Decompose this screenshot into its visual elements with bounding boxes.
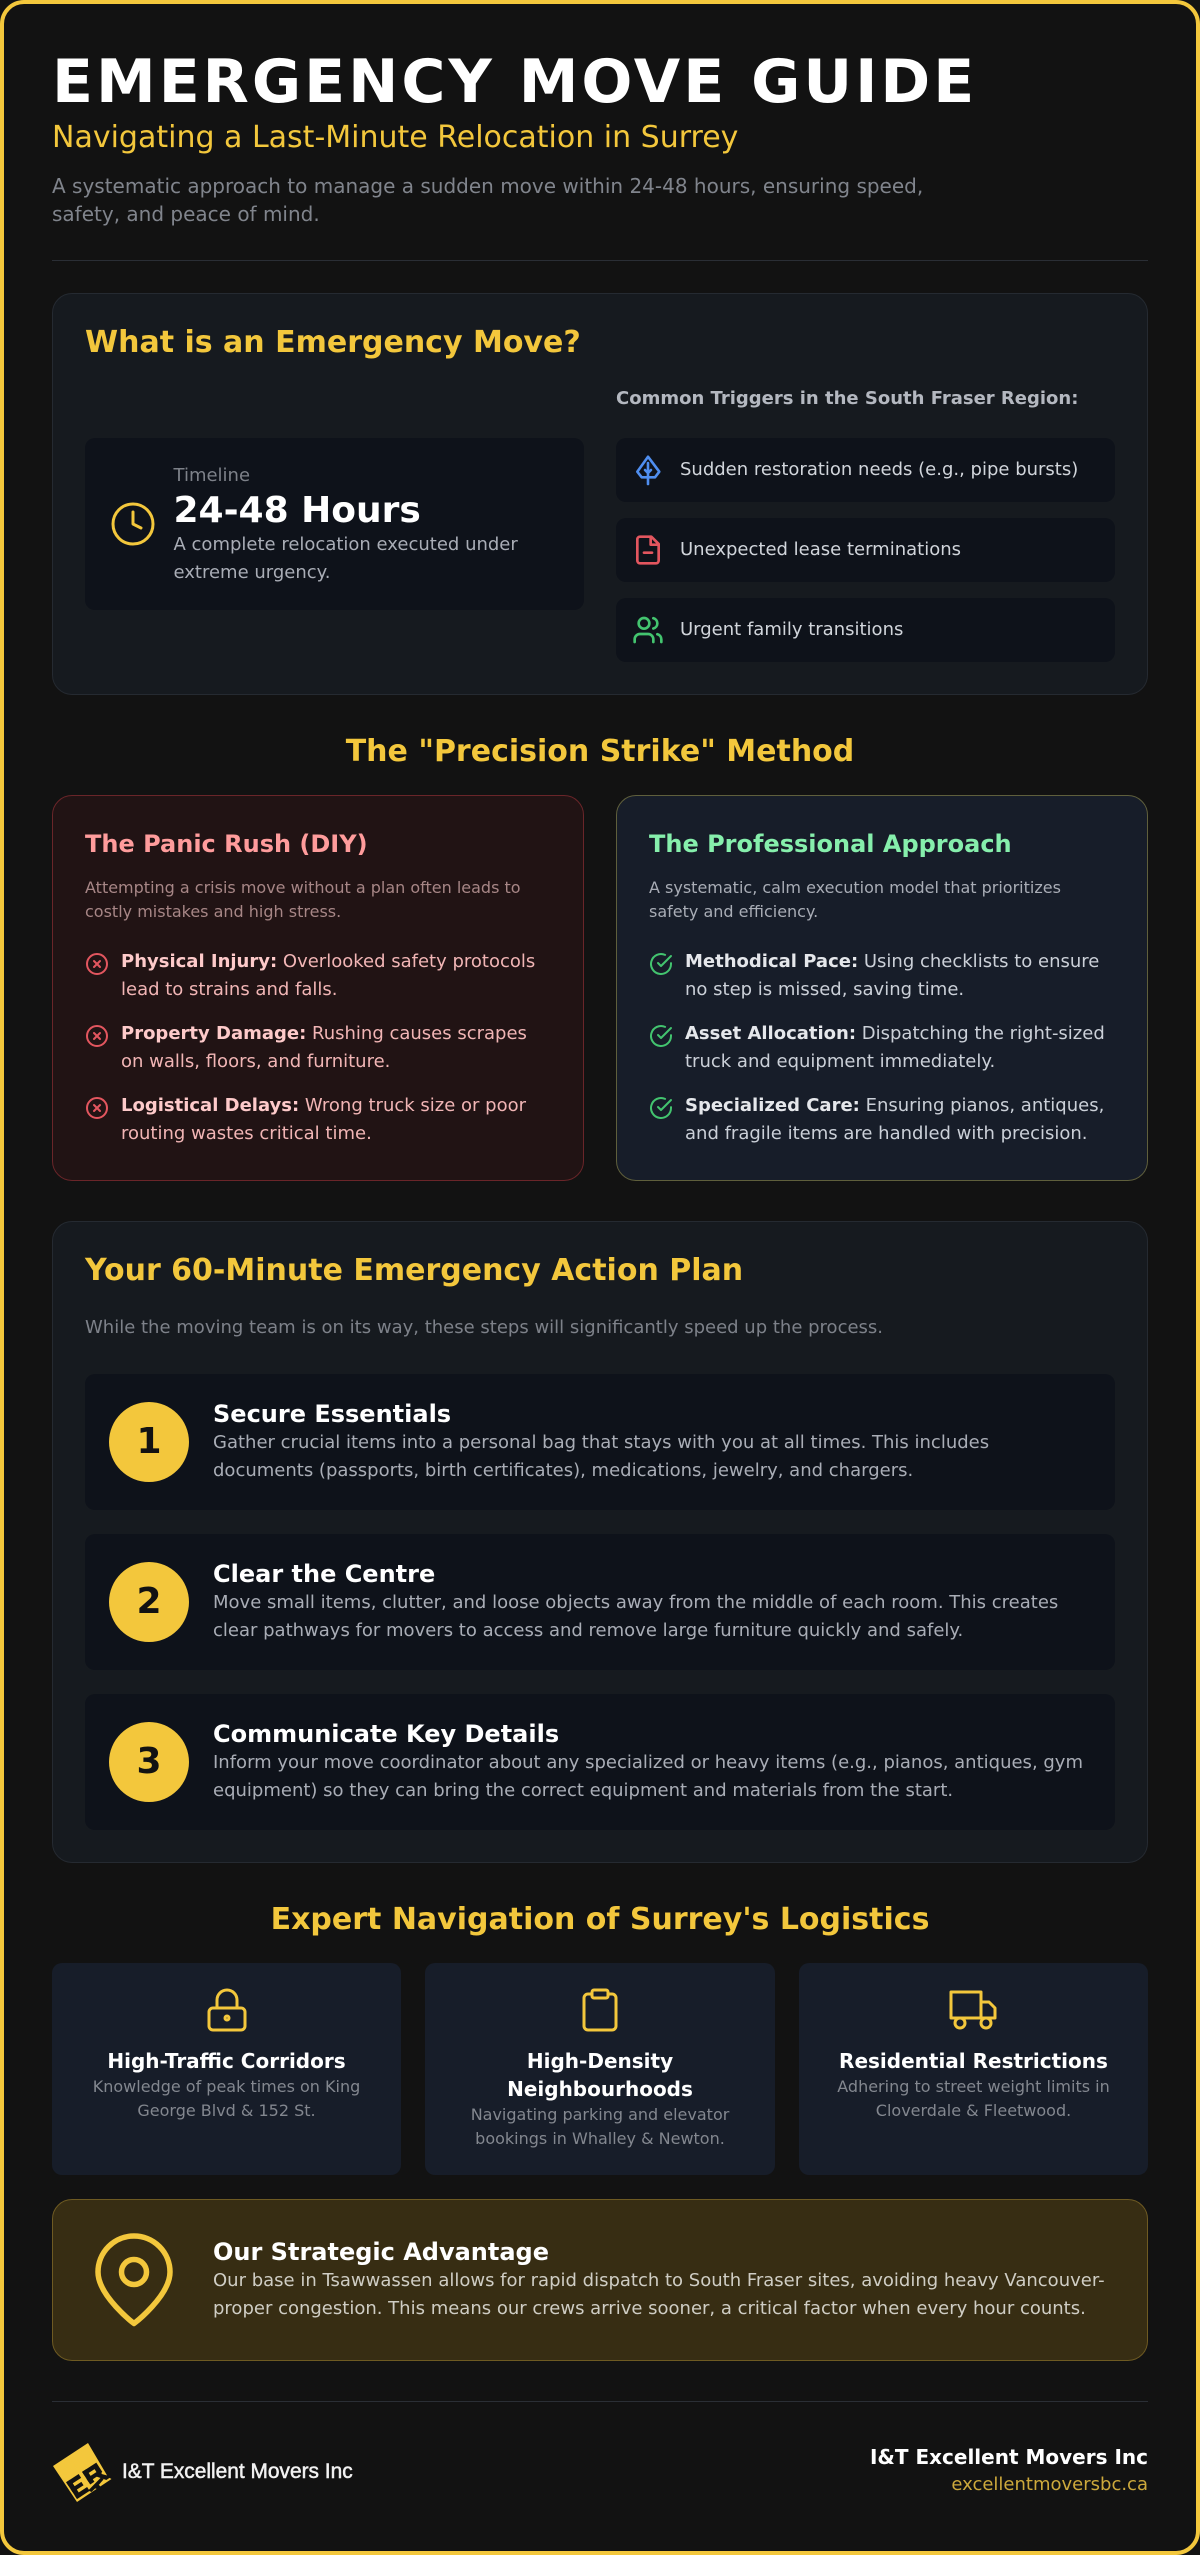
- step title: Clear the Centre: [213, 1560, 435, 1588]
- panel description: [649, 878, 1061, 921]
- intro text: [52, 174, 923, 226]
- card: high-traffic corridors: [52, 1963, 401, 2175]
- logo mark: [52, 2436, 114, 2506]
- step 3: [85, 1694, 1115, 1830]
- triggers heading: Common Triggers in the South Fraser Region:: [616, 388, 1078, 409]
- card: residential restrictions: [799, 1963, 1148, 2175]
- step 1: [85, 1374, 1115, 1510]
- panel: the panic rush: [52, 795, 584, 1181]
- panel description: Attempting a crisis move without a plan often leads to: [85, 878, 521, 897]
- item text: Logistical Delays: Wrong truck size or poor: [121, 1095, 526, 1116]
- card title: High-Traffic Corridors: [107, 2049, 346, 2073]
- item text: [121, 951, 535, 1000]
- panel: action plan: [52, 1221, 1148, 1863]
- website: excellentmoversbc.ca: [951, 2474, 1148, 2495]
- number badge: [109, 1722, 189, 1802]
- trigger text: Sudden restoration needs (e.g., pipe bursts): [680, 459, 1078, 480]
- panel description: safety and efficiency.: [649, 902, 818, 921]
- logo: [52, 2436, 362, 2506]
- icon: map pin: [95, 2233, 173, 2326]
- number badge: 2: [136, 1581, 162, 1622]
- card text: Adhering to street weight limits in: [837, 2077, 1110, 2096]
- trigger text: Unexpected lease terminations: [680, 539, 961, 560]
- card title: High-Density: [527, 2049, 673, 2073]
- step text: Move small items, clutter, and loose objects away from the middle of each room. This creates: [213, 1592, 1058, 1613]
- icon: people: [633, 616, 663, 644]
- panel: what is an emergency move: [52, 293, 1148, 695]
- intro text: safety, and peace of mind.: [52, 202, 320, 226]
- panel description: A systematic, calm execution model that prioritizes: [649, 878, 1061, 897]
- heading: Your 60-Minute Emergency Action Plan: [85, 1253, 743, 1288]
- step text: [213, 1432, 989, 1481]
- item text: [685, 951, 1099, 1000]
- timeline box: [85, 438, 584, 610]
- item: methodical pace: [650, 951, 1099, 1000]
- company details: [748, 2442, 1148, 2502]
- item text: [121, 1095, 526, 1144]
- timeline label: Timeline: [174, 464, 250, 486]
- step title: Secure Essentials: [213, 1400, 451, 1428]
- card text: [471, 2105, 730, 2148]
- card: high-density neighbourhoods: [425, 1963, 775, 2175]
- panel heading: The Panic Rush (DIY): [85, 830, 368, 858]
- item text: Specialized Care: Ensuring pianos, antiques,: [685, 1095, 1104, 1116]
- item text: truck and equipment immediately.: [685, 1051, 995, 1072]
- number badge: [109, 1562, 189, 1642]
- item text: Property Damage: Rushing causes scrapes: [121, 1023, 527, 1044]
- step title: Communicate Key Details: [213, 1720, 559, 1748]
- step text: [213, 1592, 1058, 1641]
- callout: strategic advantage: [52, 2199, 1148, 2361]
- step text: Gather crucial items into a personal bag that stays with you at all times. This includes: [213, 1432, 989, 1453]
- timeline description: [174, 534, 518, 582]
- icon: check circle: [650, 1025, 672, 1047]
- heading: precision strike: The "Precision Strike" Method: [346, 734, 854, 769]
- timeline description: extreme urgency.: [174, 562, 330, 582]
- item text: Methodical Pace: Using checklists to ensure: [685, 951, 1099, 972]
- callout title: Our Strategic Advantage: [213, 2238, 549, 2266]
- item text: [685, 1023, 1105, 1072]
- item text: [121, 1023, 527, 1072]
- icon: truck: [950, 1990, 996, 2030]
- card title: Residential Restrictions: [839, 2049, 1108, 2073]
- timeline value: 24-48 Hours: [174, 490, 421, 530]
- item text: lead to strains and falls.: [121, 979, 337, 1000]
- callout text: Our base in Tsawwassen allows for rapid dispatch to South Fraser sites, avoiding heavy Vancouver-: [213, 2270, 1105, 2291]
- callout text: [213, 2270, 1105, 2319]
- panel heading: The Professional Approach: [649, 830, 1012, 858]
- icon: restoration: [636, 455, 661, 486]
- card text: George Blvd & 152 St.: [137, 2101, 316, 2120]
- card title: [507, 2049, 693, 2101]
- trigger: family transitions: [616, 598, 1115, 662]
- item: asset allocation: [650, 1023, 1105, 1072]
- item text: no step is missed, saving time.: [685, 979, 964, 1000]
- title: EMERGENCY MOVE GUIDE: [52, 47, 977, 117]
- card title: Neighbourhoods: [507, 2077, 693, 2101]
- item text: Physical Injury: Overlooked safety protocols: [121, 951, 535, 972]
- trigger text: Urgent family transitions: [680, 619, 903, 640]
- icon: x circle: [86, 953, 108, 975]
- item text: on walls, floors, and furniture.: [121, 1051, 390, 1072]
- heading: surrey logistics: Expert Navigation of Surrey's Logistics: [271, 1902, 929, 1937]
- step text: Inform your move coordinator about any specialized or heavy items (e.g., pianos, antiques, gym: [213, 1752, 1083, 1773]
- icon: clipboard: [582, 1988, 618, 2032]
- heading: What is an Emergency Move?: [85, 325, 581, 360]
- icon: document: [636, 535, 660, 565]
- card text: Knowledge of peak times on King: [93, 2077, 360, 2096]
- description: While the moving team is on its way, these steps will significantly speed up the process.: [85, 1317, 883, 1338]
- card text: Navigating parking and elevator: [471, 2105, 729, 2124]
- icon: clock: [112, 502, 154, 546]
- card text: [93, 2077, 360, 2120]
- card text: Cloverdale & Fleetwood.: [876, 2101, 1071, 2120]
- item text: [685, 1095, 1104, 1144]
- footer: [53, 2443, 1148, 2502]
- company name: I&T Excellent Movers Inc: [870, 2445, 1148, 2469]
- intro text: A systematic approach to manage a sudden move within 24-48 hours, ensuring speed,: [52, 174, 923, 198]
- icon: lock: [208, 1988, 246, 2032]
- card text: [837, 2077, 1110, 2120]
- panel description: costly mistakes and high stress.: [85, 902, 341, 921]
- step 2: [85, 1534, 1115, 1670]
- trigger: lease terminations: [616, 518, 1115, 582]
- item: logistical delays: [86, 1095, 526, 1144]
- item: specialized care: [650, 1095, 1104, 1144]
- icon: x circle: [86, 1097, 108, 1119]
- header: [52, 47, 977, 226]
- trigger: pipe bursts: [616, 438, 1115, 502]
- timeline description: A complete relocation executed under: [174, 534, 518, 554]
- number badge: 1: [136, 1421, 162, 1462]
- callout text: proper congestion. This means our crews arrive sooner, a critical factor when every hour counts.: [213, 2298, 1086, 2319]
- item text: and fragile items are handled with precision.: [685, 1123, 1088, 1144]
- card text: bookings in Whalley & Newton.: [475, 2129, 725, 2148]
- subtitle: Navigating a Last-Minute Relocation in Surrey: [52, 120, 738, 155]
- step text: [213, 1752, 1083, 1801]
- item text: routing wastes critical time.: [121, 1123, 372, 1144]
- number badge: 3: [136, 1741, 162, 1782]
- panel: the professional approach: [616, 795, 1148, 1181]
- icon: check circle: [650, 953, 672, 975]
- step text: clear pathways for movers to access and remove large furniture quickly and safely.: [213, 1620, 963, 1641]
- panel description: [85, 878, 521, 921]
- item text: Asset Allocation: Dispatching the right-sized: [685, 1023, 1105, 1044]
- logo wordmark: I&T Excellent Movers Inc: [122, 2460, 353, 2483]
- step text: equipment) so they can bring the correct equipment and materials from the start.: [213, 1780, 953, 1801]
- item: physical injury: [86, 951, 535, 1000]
- step text: documents (passports, birth certificates), medications, jewelry, and chargers.: [213, 1460, 913, 1481]
- item: property damage: [86, 1023, 527, 1072]
- number badge: [109, 1402, 189, 1482]
- icon: x circle: [86, 1025, 108, 1047]
- icon: check circle: [650, 1097, 672, 1119]
